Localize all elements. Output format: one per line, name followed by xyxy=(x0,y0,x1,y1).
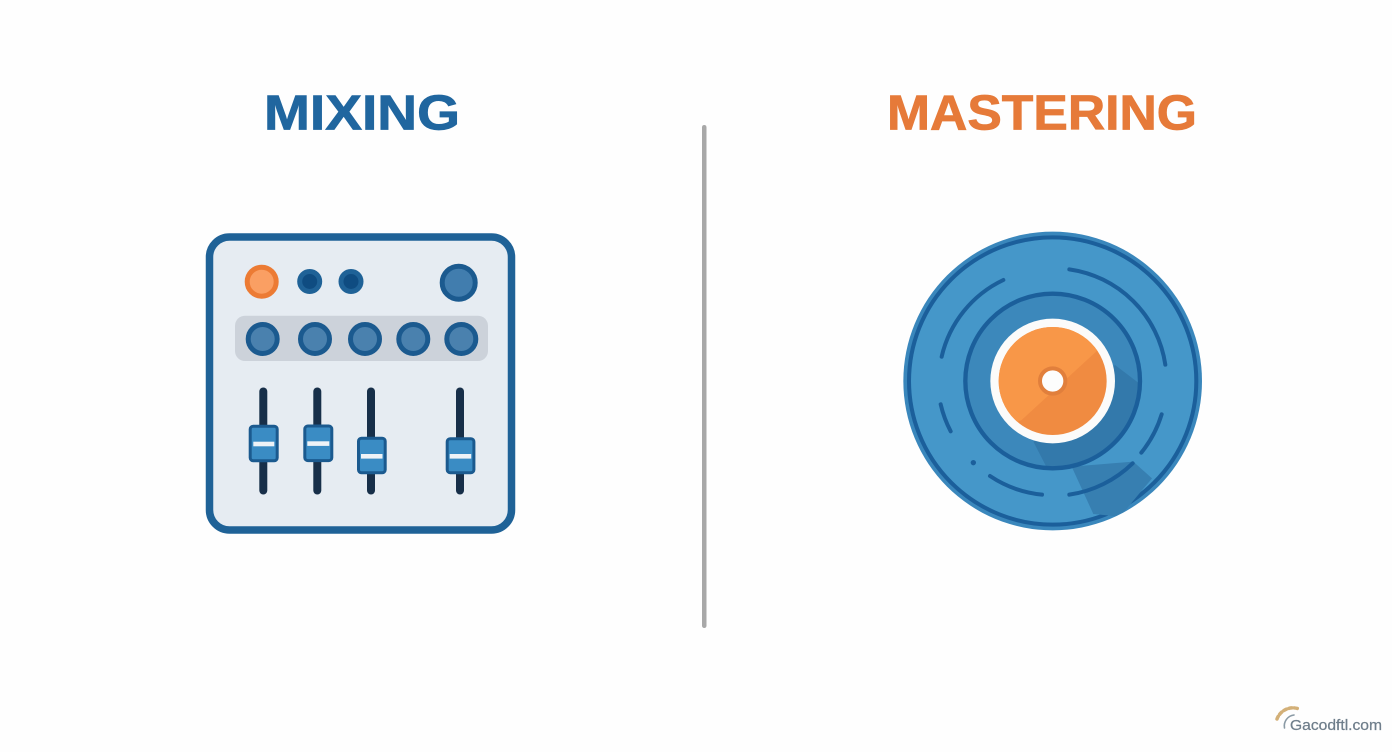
disc xyxy=(903,232,1202,530)
broken grooves xyxy=(941,269,1165,495)
heading: mastering: MASTERING xyxy=(887,86,1197,140)
watermark xyxy=(1277,708,1382,734)
orange indicator light xyxy=(247,267,276,296)
heading: mixing: MIXING xyxy=(264,86,460,140)
fader tracks xyxy=(263,392,460,490)
white ring xyxy=(990,319,1115,443)
small knobs xyxy=(300,272,361,292)
groove dot xyxy=(971,460,976,465)
knob row xyxy=(248,324,476,354)
inner shadow xyxy=(1034,365,1138,466)
fader handle 3 xyxy=(358,438,385,473)
fader handle 2 xyxy=(305,426,332,461)
disc outer groove xyxy=(909,237,1196,525)
icon: vinyl record xyxy=(903,232,1202,530)
fader handle 4 xyxy=(447,439,474,473)
label highlight xyxy=(998,327,1098,422)
fader handle 1 xyxy=(250,426,277,461)
inner groove ring xyxy=(965,294,1140,468)
icon: mixing console xyxy=(210,237,512,530)
inner area xyxy=(965,294,1140,468)
divider xyxy=(702,125,706,628)
watermark gear xyxy=(1277,708,1299,728)
spindle hole xyxy=(1040,368,1065,394)
large knob xyxy=(442,266,475,299)
orange label xyxy=(999,327,1107,435)
knob row panel xyxy=(235,316,488,361)
outer shadow band xyxy=(1072,462,1152,517)
watermark text: Gacodftl.com xyxy=(1290,718,1382,734)
infographic canvas xyxy=(206,94,1382,730)
console body xyxy=(210,237,512,530)
